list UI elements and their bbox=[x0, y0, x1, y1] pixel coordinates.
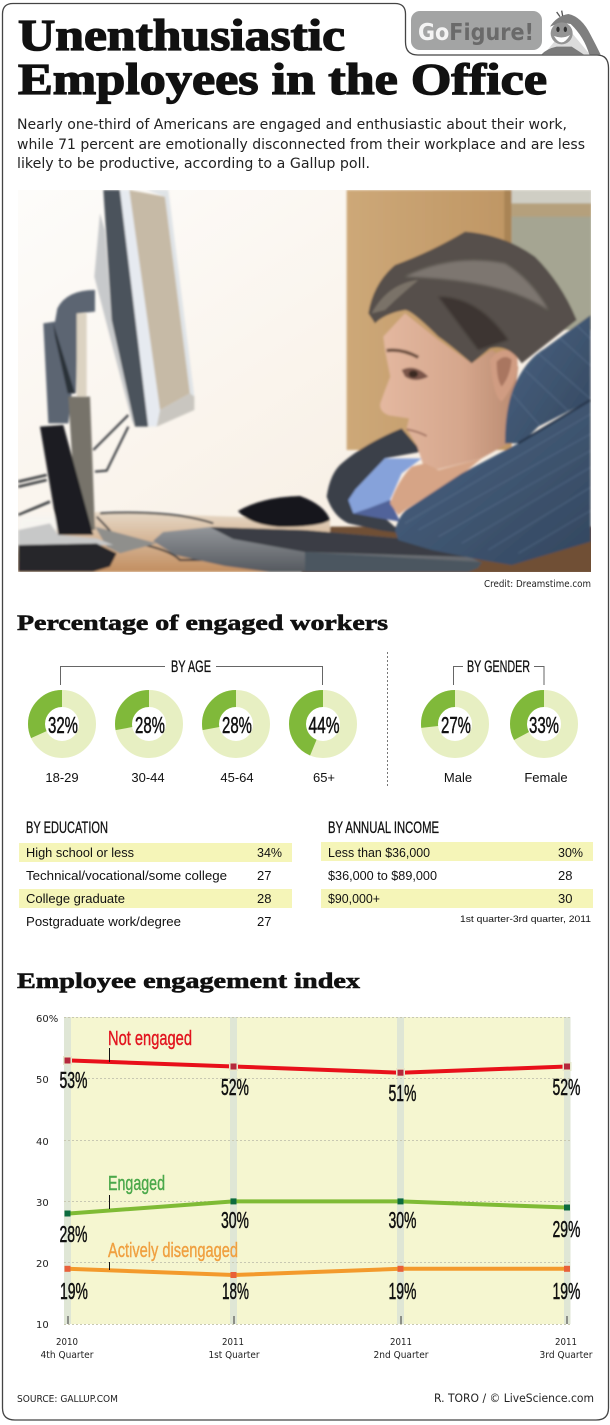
line chart: engagement index bbox=[36, 1014, 593, 1361]
value labels: 18% bbox=[222, 1278, 249, 1304]
intro text bbox=[17, 117, 585, 172]
donut: 45-64: 28% bbox=[222, 712, 252, 738]
value labels: 30% bbox=[221, 1207, 249, 1233]
series: not engaged bbox=[63, 1028, 572, 1077]
table: by annual income: BY ANNUAL INCOME bbox=[328, 818, 439, 837]
donut: 45-64: 45-64 bbox=[220, 770, 254, 785]
value labels: 19% bbox=[60, 1278, 88, 1304]
y axis labels: 10 bbox=[36, 1320, 49, 1331]
x axis labels: 1st Quarter bbox=[208, 1350, 260, 1361]
far sleeve bbox=[327, 428, 422, 533]
series: actively disengaged bbox=[64, 1240, 570, 1278]
man bbox=[327, 232, 592, 565]
x axis labels: 3rd Quarter bbox=[540, 1350, 593, 1361]
series: engaged: Engaged bbox=[108, 1173, 165, 1195]
value labels bbox=[60, 1067, 580, 1304]
table: by education: College graduate bbox=[26, 891, 125, 906]
x axis labels: 2010 bbox=[56, 1337, 78, 1348]
donut: 65+: 44% bbox=[308, 712, 340, 738]
hair bbox=[368, 232, 577, 363]
table: by education: Technical/vocational/some college bbox=[26, 868, 227, 883]
donut: 18-29 bbox=[36, 698, 88, 785]
badge plate bbox=[411, 11, 542, 50]
donut: 30-44 bbox=[124, 698, 174, 785]
title bbox=[18, 11, 547, 104]
donut: male: Male bbox=[444, 770, 472, 785]
ear bbox=[490, 350, 518, 402]
table: by education: Postgraduate work/degree bbox=[26, 914, 181, 929]
plot area bbox=[64, 1017, 570, 1324]
donut: male bbox=[430, 698, 480, 785]
title: Employees in the Office bbox=[18, 55, 547, 104]
table: by education: 27 bbox=[257, 914, 271, 929]
table: by annual income: 30% bbox=[558, 845, 583, 860]
x axis labels: 4th Quarter bbox=[40, 1350, 94, 1361]
photo: bored man at computer bbox=[18, 190, 595, 573]
table: by education: BY EDUCATION bbox=[26, 818, 108, 837]
monitor back bbox=[94, 213, 135, 427]
table: by education: 28 bbox=[257, 891, 271, 906]
table: by education: 34% bbox=[257, 845, 282, 860]
brow and eye bbox=[387, 350, 418, 357]
table: by annual income: $90,000+ bbox=[328, 891, 380, 906]
badge character bbox=[541, 11, 601, 55]
donut: 18-29: 32% bbox=[48, 712, 78, 738]
table: by annual income: 30 bbox=[558, 891, 572, 906]
donut: 65+ bbox=[298, 698, 348, 785]
donut: 30-44: 30-44 bbox=[131, 770, 165, 785]
table: by annual income: 1st quarter-3rd quarter, 2011 bbox=[460, 914, 591, 925]
value labels: 28% bbox=[60, 1221, 88, 1247]
raised arm bbox=[505, 315, 591, 443]
x axis labels: 2011 bbox=[555, 1337, 577, 1348]
source: SOURCE: GALLUP.COM bbox=[17, 1394, 118, 1405]
value labels: 19% bbox=[552, 1278, 580, 1304]
hand bbox=[390, 458, 482, 515]
neck and face bbox=[380, 313, 518, 469]
x axis labels: 2nd Quarter bbox=[374, 1350, 429, 1361]
value labels: 30% bbox=[388, 1207, 416, 1233]
resting arm bbox=[395, 400, 591, 565]
desk bbox=[18, 512, 330, 572]
intro text: Nearly one-third of Americans are engaged and enthusiastic about their work, bbox=[17, 117, 567, 133]
y axis labels: 20 bbox=[36, 1259, 49, 1270]
value labels: 52% bbox=[221, 1074, 249, 1100]
stand arm and column bbox=[43, 290, 95, 423]
shirt cuff bbox=[348, 458, 422, 522]
heading: employee engagement index: Employee engagement index bbox=[17, 968, 360, 993]
table: by annual income: $36,000 to $89,000 bbox=[328, 868, 437, 883]
photo credit: Credit: Dreamstime.com bbox=[484, 579, 591, 590]
heading: percentage of engaged workers: Percentage of engaged workers bbox=[17, 610, 389, 635]
x axis labels bbox=[40, 1337, 593, 1361]
x axis labels: 2011 bbox=[222, 1337, 244, 1348]
byline: R. TORO / © LiveScience.com bbox=[434, 1391, 594, 1405]
table: by education: 27 bbox=[257, 868, 271, 883]
divider bbox=[386, 652, 388, 786]
table: by annual income: Less than $36,000 bbox=[328, 845, 430, 860]
intro text: while 71 percent are emotionally disconnected from their workplace and are less bbox=[17, 137, 585, 153]
y axis labels: 30 bbox=[36, 1198, 49, 1209]
table: by annual income: 28 bbox=[558, 868, 572, 883]
value labels: 29% bbox=[552, 1216, 580, 1242]
series: engaged bbox=[64, 1173, 570, 1216]
y axis labels: 50 bbox=[36, 1075, 49, 1086]
y axis labels: 40 bbox=[36, 1137, 49, 1148]
donut: 65+: 65+ bbox=[313, 770, 335, 785]
monitor and stand bbox=[18, 190, 220, 572]
badge wordmark: GoFigure! bbox=[418, 20, 534, 46]
series: actively disengaged: Actively disengaged bbox=[108, 1240, 238, 1262]
by age bracket: BY AGE bbox=[171, 657, 211, 676]
x axis labels: 2011 bbox=[390, 1337, 412, 1348]
table: by education: High school or less bbox=[26, 845, 134, 860]
donut: female: 33% bbox=[529, 712, 559, 738]
value labels: 51% bbox=[388, 1080, 416, 1106]
value labels: 53% bbox=[60, 1067, 88, 1093]
table: by education bbox=[19, 818, 292, 929]
keyboard bbox=[153, 527, 482, 572]
y axis labels: 60% bbox=[36, 1014, 58, 1025]
table: by annual income bbox=[321, 818, 593, 925]
intro text: likely to be productive, according to a Gallup poll. bbox=[17, 156, 370, 172]
donut: male: 27% bbox=[441, 712, 471, 738]
by gender bracket bbox=[454, 657, 544, 685]
donut: 45-64 bbox=[210, 698, 262, 785]
donut: female: Female bbox=[524, 770, 568, 785]
title: Unenthusiastic bbox=[18, 11, 345, 60]
y axis labels bbox=[36, 1014, 58, 1331]
phone bbox=[18, 543, 117, 572]
value labels: 52% bbox=[552, 1074, 580, 1100]
donut: 30-44: 28% bbox=[135, 712, 165, 738]
donut: 18-29: 18-29 bbox=[45, 770, 79, 785]
by gender bracket: BY GENDER bbox=[467, 657, 530, 676]
value labels: 19% bbox=[388, 1278, 416, 1304]
office background bbox=[302, 190, 595, 573]
donut: female bbox=[518, 698, 570, 785]
x ticks bbox=[68, 1316, 567, 1324]
by age bracket bbox=[60, 657, 322, 685]
GoFigure badge bbox=[411, 11, 601, 55]
mouse bbox=[238, 496, 330, 527]
series: not engaged: Not engaged bbox=[108, 1028, 192, 1050]
